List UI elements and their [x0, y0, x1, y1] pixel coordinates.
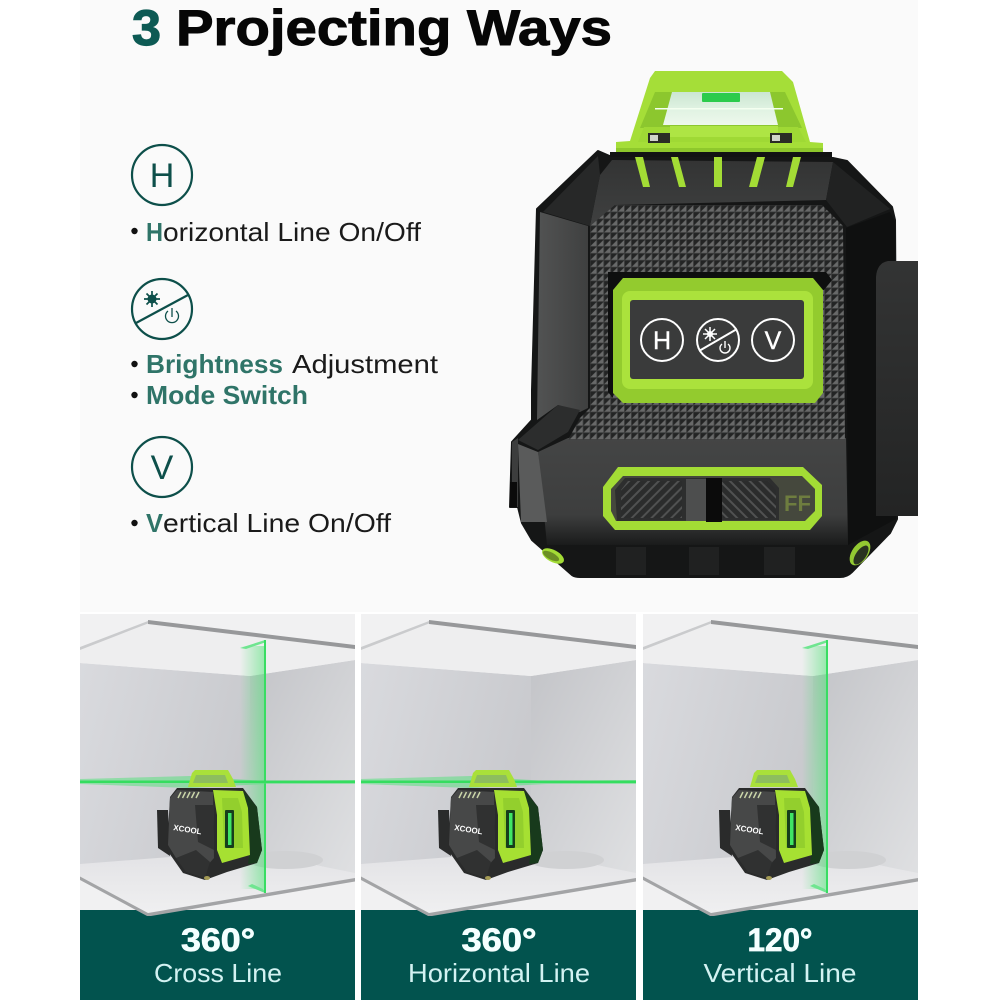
text: brightness adjustment: Adjustment	[292, 349, 439, 379]
vertical laser	[240, 640, 266, 893]
caption	[704, 922, 856, 988]
horizontal laser	[361, 776, 636, 788]
panel: cross line	[80, 614, 355, 1000]
icon: brightness and power button	[132, 279, 192, 339]
caption	[408, 922, 590, 988]
page background	[80, 0, 918, 612]
panel button V	[752, 319, 794, 361]
bump top	[518, 405, 580, 450]
room scene	[361, 614, 636, 916]
brand label: XCOOL	[173, 823, 202, 836]
caption	[154, 922, 282, 988]
title: 3	[132, 0, 161, 56]
bump rim	[510, 438, 518, 507]
laser level product close-up	[510, 71, 918, 577]
caption: Cross Line	[154, 958, 282, 988]
caption band	[80, 910, 355, 1000]
text: horizontal line on/off: orizontal Line On/Off	[163, 217, 422, 247]
mounting holes	[540, 545, 566, 567]
panel: horizontal line	[361, 614, 636, 1000]
text: brightness adjustment	[131, 349, 439, 379]
textured grip	[568, 205, 845, 440]
panel button brightness	[697, 319, 739, 361]
icon: V button: V	[151, 449, 174, 487]
brand label: XCOOL	[454, 823, 483, 836]
vent slits	[635, 157, 801, 187]
caption: Horizontal Line	[408, 958, 590, 988]
icon: H button	[132, 145, 192, 205]
caption: 360°	[181, 922, 255, 958]
panel: vertical line	[643, 614, 918, 1000]
text: vertical line on/off: V	[146, 508, 164, 538]
bump face	[518, 444, 547, 522]
control panel	[608, 272, 832, 403]
panel button H	[641, 319, 683, 361]
text: vertical line on/off: ertical Line On/Off	[163, 508, 392, 538]
left column	[537, 212, 588, 420]
top left chamfer	[543, 156, 600, 226]
caption: 120°	[748, 922, 812, 958]
slide switch	[603, 467, 822, 530]
laser level	[719, 770, 824, 880]
panel button V: V	[765, 327, 782, 355]
icon: H button: H	[150, 157, 174, 195]
top cap	[610, 71, 832, 157]
brand label: XCOOL	[735, 823, 764, 836]
bottom slots	[616, 547, 795, 575]
right side	[846, 212, 896, 545]
room scene	[643, 614, 918, 916]
caption: 360°	[462, 922, 536, 958]
text: horizontal line on/off: H	[146, 217, 163, 247]
body silhouette	[510, 151, 897, 577]
lower face	[538, 438, 848, 545]
caption: Vertical Line	[704, 958, 856, 988]
laser level	[157, 770, 262, 880]
room scene	[80, 614, 355, 916]
title: Projecting Ways	[176, 0, 612, 56]
text: mode switch: Mode Switch	[146, 380, 308, 410]
top face	[590, 160, 833, 226]
top right chamfer	[826, 162, 890, 227]
text: brightness adjustment: Brightness	[146, 349, 283, 379]
icon: V button	[132, 437, 192, 497]
panel button H: H	[653, 327, 671, 355]
caption band	[643, 910, 918, 1000]
caption band	[361, 910, 636, 1000]
slide switch: FF	[784, 491, 811, 516]
horizontal laser	[80, 776, 355, 788]
laser level	[438, 770, 543, 880]
battery pack	[876, 261, 918, 516]
vertical laser	[802, 640, 828, 893]
